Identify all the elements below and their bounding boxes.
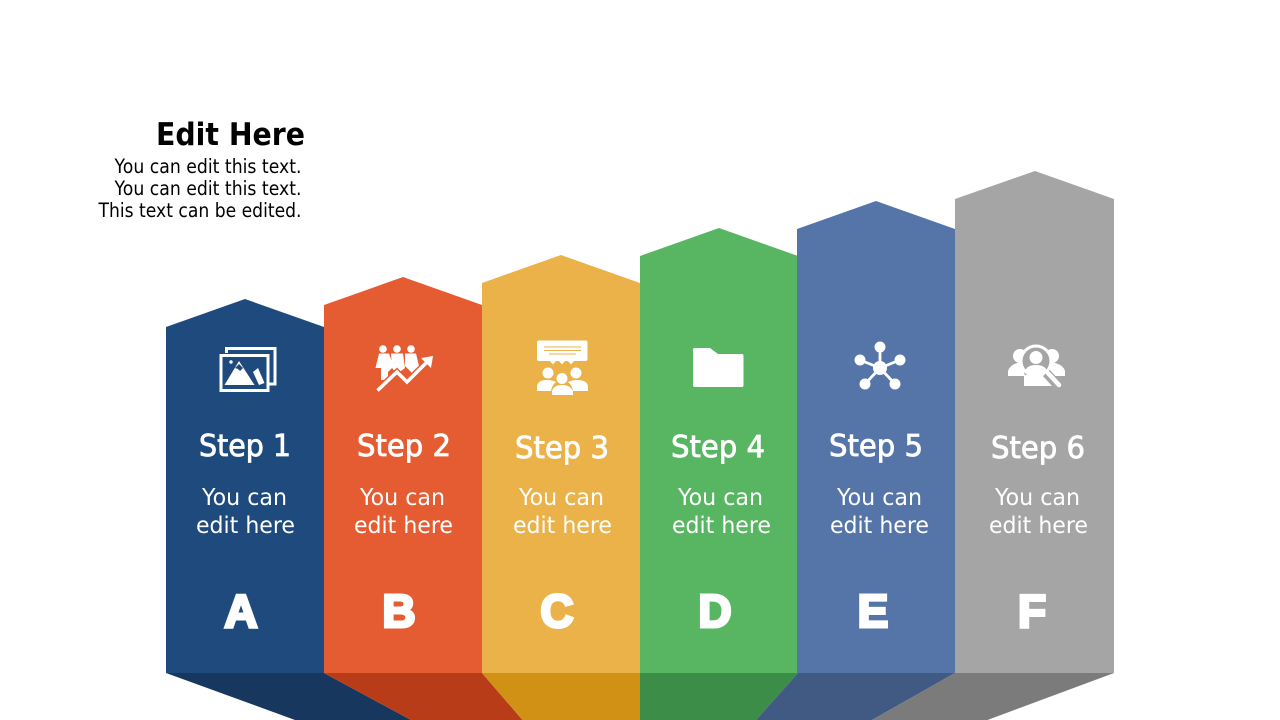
description: [830, 483, 929, 539]
step label: Step 3: [515, 431, 609, 466]
description: You can: [994, 483, 1080, 511]
arrow column: step 2: [324, 277, 482, 673]
arrow column: step 3: [482, 255, 640, 673]
step label: Step 2: [357, 429, 451, 464]
shadow: step 6: [872, 673, 1114, 720]
icon: team growth: [376, 345, 433, 390]
icon: pictures: [221, 348, 275, 390]
step label: Step 4: [671, 430, 765, 465]
description: [989, 483, 1088, 539]
letter: D: [698, 585, 732, 637]
icon: group discussion: [537, 340, 588, 395]
panel: step 5: [756, 201, 955, 720]
step label: Step 1: [199, 429, 291, 464]
shadow: step 2: [324, 673, 522, 720]
text block: heading and description: [98, 117, 305, 222]
description: edit here: [354, 511, 453, 539]
description: edit here: [989, 511, 1088, 539]
shadow: step 5: [756, 673, 955, 720]
description text: This text can be edited.: [98, 199, 302, 222]
description: edit here: [513, 511, 612, 539]
description: [672, 483, 771, 539]
letter: E: [858, 585, 888, 637]
arrow column: step 6: [955, 171, 1114, 673]
description: You can: [836, 483, 922, 511]
panel: step 2: [324, 277, 522, 720]
description: edit here: [196, 511, 295, 539]
description: [354, 483, 453, 539]
panel: step 4: [640, 228, 798, 720]
description: You can: [359, 483, 445, 511]
letter: C: [540, 585, 574, 637]
description: [196, 483, 295, 539]
description text: You can edit this text.: [114, 177, 302, 200]
step label: Step 5: [829, 429, 923, 464]
description text: [98, 155, 302, 222]
shadow: step 3: [482, 673, 640, 720]
icon: network: [854, 342, 906, 390]
description: edit here: [672, 511, 771, 539]
arrow column: step 5: [797, 201, 955, 673]
description text: You can edit this text.: [114, 155, 302, 178]
letter: B: [382, 585, 416, 637]
description: edit here: [830, 511, 929, 539]
description: You can: [201, 483, 287, 511]
arrow column: step 4: [640, 228, 798, 673]
description: [513, 483, 612, 539]
description: You can: [677, 483, 763, 511]
step label: Step 6: [991, 431, 1085, 466]
heading: Edit Here: [156, 117, 305, 153]
letter: F: [1018, 585, 1046, 637]
arrow column: step 1: [166, 299, 324, 673]
description: You can: [518, 483, 604, 511]
shadow: step 4: [640, 673, 798, 720]
panel: step 6: [872, 171, 1114, 720]
panel: step 3: [482, 255, 640, 720]
letter: A: [224, 585, 258, 637]
icon: people search: [1008, 346, 1065, 386]
shadow: step 1: [166, 673, 411, 720]
icon: folder: [693, 348, 744, 387]
panel: step 1: [166, 299, 411, 720]
